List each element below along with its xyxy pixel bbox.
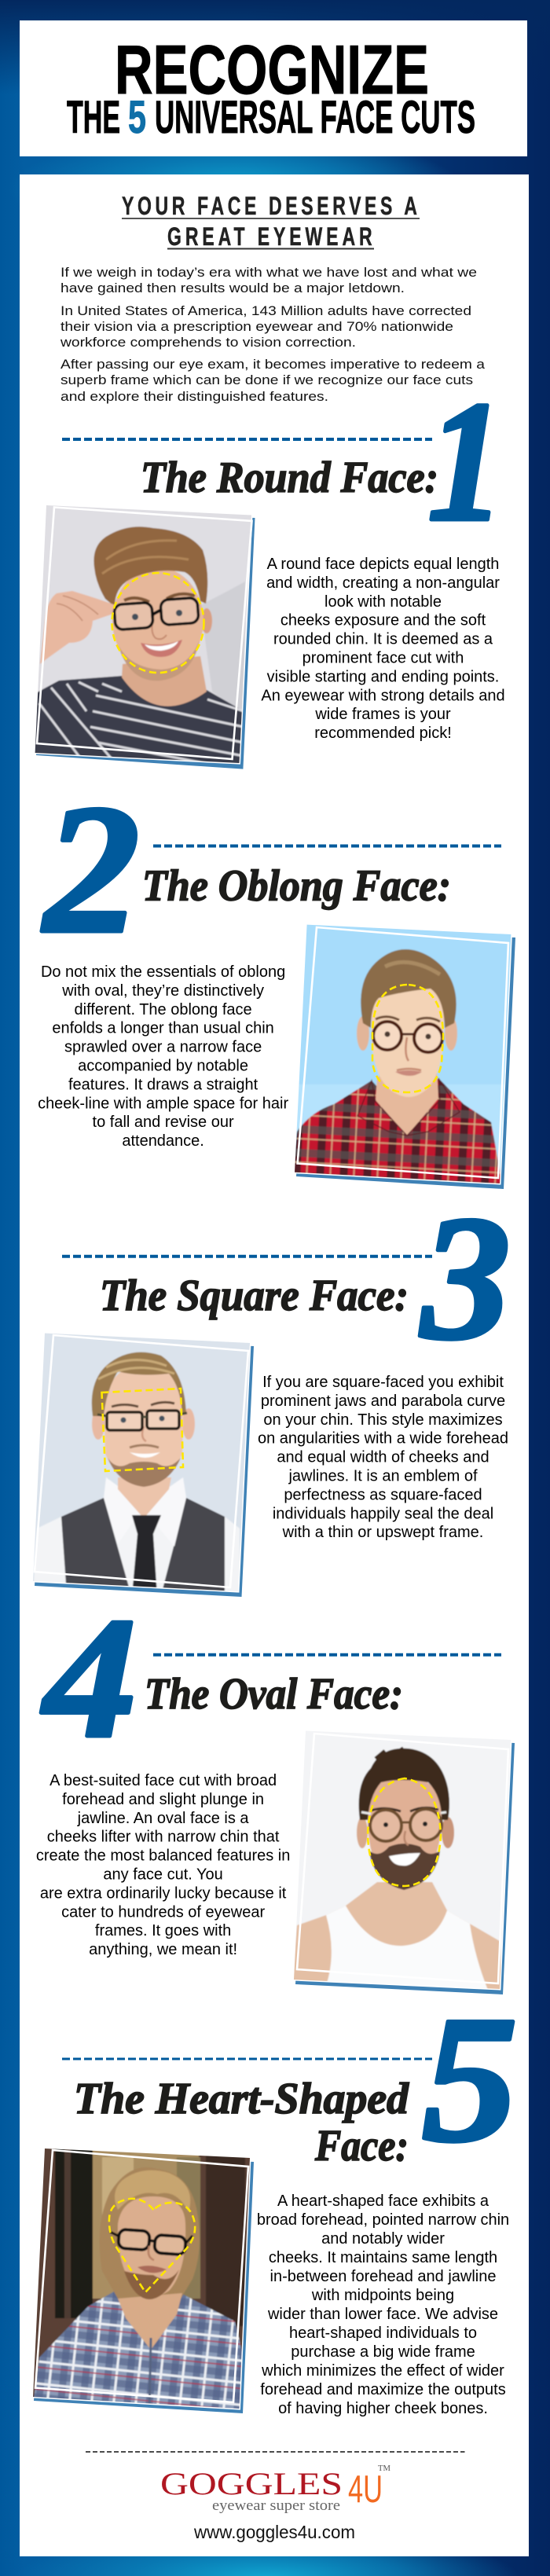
text block: introduction: superb frame which can be done if we recognize our face cuts bbox=[60, 372, 473, 387]
text block: square face: If you are square-faced you exhibit bbox=[262, 1374, 504, 1391]
face outline: oblong bbox=[372, 985, 443, 1092]
photo: round face man bbox=[31, 503, 255, 770]
logo: goggles4u: GOGGLES bbox=[160, 2466, 343, 2501]
text block: heart-shaped face: cheeks. It maintains same length bbox=[269, 2249, 497, 2266]
text block: oval face bbox=[36, 1772, 290, 1958]
text block: oval face: create the most balanced features in bbox=[36, 1848, 290, 1865]
text block: heart-shaped face: wider than lower face. We advise bbox=[267, 2306, 498, 2323]
text block: introduction: and explore their distinguished features. bbox=[60, 389, 328, 404]
panel: title banner bbox=[20, 20, 527, 156]
section 1: the round face bbox=[35, 403, 504, 769]
photo: heart-shaped face man bbox=[30, 2145, 254, 2413]
text block: introduction bbox=[60, 265, 486, 404]
heading: the heart-shaped face: Face: bbox=[314, 2122, 409, 2171]
heading: the oval face: The Oval Face: bbox=[145, 1670, 403, 1719]
text block: oblong face: attendance. bbox=[122, 1132, 204, 1150]
number 4: 4 bbox=[41, 1582, 137, 1774]
logo: goggles4u: 4U bbox=[348, 2468, 383, 2511]
text block: oblong face: Do not mix the essentials of oblong bbox=[41, 963, 285, 981]
text block: heart-shaped face: heart-shaped individuals to bbox=[289, 2325, 477, 2342]
text block: oblong face: accompanied by notable bbox=[78, 1058, 248, 1075]
text block: oblong face: cheek-line with ample space for hair bbox=[38, 1095, 288, 1112]
text block: oval face: anything, we mean it! bbox=[89, 1941, 237, 1958]
subtitle: the 5 universal face cuts: THE bbox=[67, 92, 120, 143]
text block: round face: prominent face cut with bbox=[302, 649, 464, 666]
section 3: the square face bbox=[33, 1218, 508, 1597]
text block: introduction: After passing our eye exam, it becomes imperative to redeem a bbox=[60, 357, 486, 372]
text block: round face bbox=[261, 556, 505, 742]
text block: round face: rounded chin. It is deemed as a bbox=[273, 631, 493, 648]
heading: the oblong face: The Oblong Face: bbox=[142, 861, 451, 910]
number 2: 2 bbox=[42, 767, 140, 971]
heading: the heart-shaped face: The Heart-Shaped bbox=[74, 2075, 409, 2123]
text block: introduction: If we weigh in today’s era with what we have lost and what we bbox=[60, 265, 477, 280]
heading: the heart-shaped face bbox=[74, 2075, 409, 2171]
heading: your face deserves a great eyewear: GREAT EYEWEAR bbox=[167, 222, 372, 251]
text block: oblong face: sprawled over a narrow face bbox=[64, 1039, 262, 1056]
photo: square face man bbox=[30, 1328, 254, 1597]
text block: oval face: jawline. An oval face is a bbox=[77, 1810, 249, 1827]
text block: square face: individuals happily seal the deal bbox=[273, 1505, 493, 1522]
text block: oval face: forehead and slight plunge in bbox=[62, 1791, 264, 1808]
text block: round face: recommended pick! bbox=[314, 725, 452, 742]
logo: goggles4u bbox=[160, 2464, 390, 2514]
photo: oblong face man bbox=[291, 919, 515, 1189]
face outline: round bbox=[112, 573, 204, 673]
text block: heart-shaped face: purchase a big wide frame bbox=[291, 2343, 475, 2361]
text block: round face: A round face depicts equal length bbox=[267, 556, 499, 573]
text block: oval face: cater to hundreds of eyewear bbox=[61, 1903, 265, 1921]
text block: round face: look with notable bbox=[324, 593, 442, 611]
subtitle: the 5 universal face cuts: 5 bbox=[128, 92, 146, 143]
face outline: square bbox=[102, 1389, 183, 1471]
text block: round face: wide frames is your bbox=[314, 706, 451, 723]
title: recognize: RECOGNIZE bbox=[115, 31, 429, 108]
text block: square face: and equal width of cheeks and bbox=[277, 1449, 490, 1466]
text block: oblong face: features. It draws a straight bbox=[68, 1076, 258, 1093]
text block: introduction: In United States of America, 143 Million adults have corrected bbox=[60, 303, 471, 318]
section 5: the heart-shaped face bbox=[33, 2020, 515, 2416]
text block: heart-shaped face: which minimizes the effect of wider bbox=[261, 2362, 504, 2380]
text block: oblong face: to fall and revise our bbox=[93, 1114, 234, 1131]
text block: oblong face: different. The oblong face bbox=[75, 1001, 252, 1018]
heading: the round face: The Round Face: bbox=[141, 453, 438, 502]
text block: heart-shaped face: in-between forehead and jawline bbox=[270, 2268, 496, 2285]
text block: oblong face: with oval, they’re distinctively bbox=[61, 982, 264, 1000]
text block: round face: and width, creating a non-angular bbox=[266, 574, 500, 592]
number 5: 5 bbox=[422, 1979, 518, 2179]
text block: oval face: are extra ordinarily lucky because it bbox=[40, 1884, 287, 1902]
text block: round face: An eyewear with strong details and bbox=[261, 687, 505, 704]
heading: your face deserves a great eyewear bbox=[122, 192, 420, 251]
text block: heart-shaped face: and notably wider bbox=[321, 2230, 445, 2248]
section 4: the oval face bbox=[36, 1582, 515, 1994]
photo: oval face man bbox=[291, 1727, 515, 1994]
heading: your face deserves a great eyewear: YOUR FACE DESERVES A bbox=[122, 192, 417, 220]
text block: square face bbox=[258, 1374, 508, 1541]
text block: oval face: cheeks lifter with narrow chin that bbox=[47, 1829, 280, 1846]
face outline: heart bbox=[109, 2199, 195, 2292]
text block: square face: with a thin or upswept frame. bbox=[282, 1524, 483, 1541]
text block: round face: visible starting and ending points. bbox=[267, 668, 499, 685]
logo: goggles4u: eyewear super store bbox=[212, 2497, 340, 2514]
number 3: 3 bbox=[420, 1180, 511, 1376]
section 2: the oblong face bbox=[38, 767, 515, 1189]
text block: square face: jawlines. It is an emblem of bbox=[288, 1468, 478, 1485]
text block: oblong face: enfolds a longer than usual chin bbox=[52, 1020, 274, 1037]
logo: goggles4u: TM bbox=[378, 2464, 390, 2473]
text block: heart-shaped face: A heart-shaped face exhibits a bbox=[277, 2193, 490, 2210]
text block: square face: on angularities with a wide forehead bbox=[258, 1430, 508, 1448]
text block: square face: prominent jaws and parabola curve bbox=[261, 1393, 505, 1410]
text block: introduction: workforce comprehends to vision correction. bbox=[60, 335, 356, 350]
face outline: oval bbox=[368, 1778, 441, 1886]
text block: introduction: their vision via a prescription eyewear and 70% nationwide bbox=[60, 319, 453, 334]
text block: oval face: any face cut. You bbox=[103, 1866, 223, 1883]
text block: introduction: have gained then results would be a major letdown. bbox=[60, 281, 405, 295]
text block: heart-shaped face: with midpoints being bbox=[311, 2287, 454, 2304]
text block: heart-shaped face: broad forehead, pointed narrow chin bbox=[257, 2211, 509, 2229]
text block: heart-shaped face: of having higher cheek bones. bbox=[278, 2400, 488, 2417]
url: www.goggles4u.com bbox=[193, 2522, 355, 2542]
subtitle: the 5 universal face cuts bbox=[67, 92, 475, 143]
text block: oval face: A best-suited face cut with broad bbox=[50, 1772, 277, 1789]
text block: heart-shaped face: forehead and maximize the outputs bbox=[260, 2381, 506, 2398]
text block: heart-shaped face bbox=[257, 2193, 509, 2417]
text block: square face: perfectness as square-faced bbox=[284, 1486, 482, 1503]
text block: oval face: frames. It goes with bbox=[95, 1922, 231, 1939]
text block: oblong face bbox=[38, 963, 288, 1150]
footer: logo and url bbox=[86, 2452, 465, 2542]
text block: round face: cheeks exposure and the soft bbox=[280, 612, 486, 629]
text block: square face: on your chin. This style maximizes bbox=[263, 1411, 503, 1429]
heading: the square face: The Square Face: bbox=[100, 1271, 409, 1320]
number 1: 1 bbox=[427, 365, 504, 557]
